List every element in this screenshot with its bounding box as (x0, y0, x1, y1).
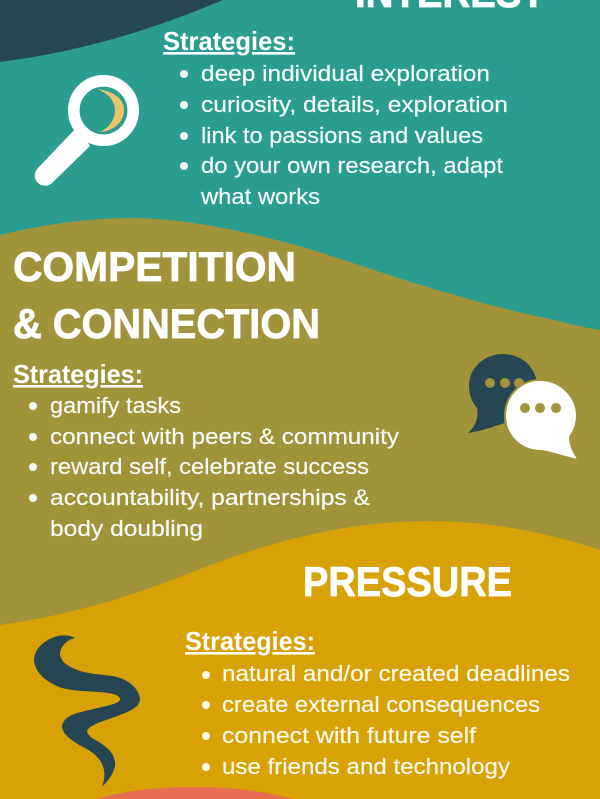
text block: pressure strategies (185, 626, 570, 779)
strategy list: reward self, celebrate success (50, 454, 369, 479)
strategy list: what works (200, 184, 320, 209)
heading: competition and connection (13, 243, 320, 347)
panel: pressure background (0, 521, 600, 799)
heading: pressure: PRESSURE (303, 558, 512, 605)
panel: competition and connection background (0, 218, 600, 640)
coral wave at the bottom (97, 787, 293, 799)
strategies label: Strategies: (185, 626, 315, 656)
strategy list: connect with peers & community (50, 424, 399, 449)
icon: speech bubbles (468, 354, 579, 460)
strategies label: Strategies: (13, 359, 143, 389)
strategies label: Strategies: (163, 26, 295, 56)
strategy list: do your own research, adapt (201, 153, 503, 178)
icon: magnifying glass (35, 81, 133, 186)
strategy list: link to passions and values (201, 123, 483, 148)
strategy list: body doubling (50, 516, 203, 541)
icon: wavy steam (34, 635, 140, 787)
strategy list: accountability, partnerships & (50, 485, 370, 510)
text block: competition strategies (13, 359, 399, 541)
strategy list: natural and/or created deadlines (222, 661, 570, 686)
strategy list: curiosity, details, exploration (201, 92, 508, 117)
dark navy corner wave (0, 0, 223, 62)
heading: competition and connection: & CONNECTION (13, 300, 320, 347)
strategy list: connect with future self (222, 723, 477, 748)
strategy list: gamify tasks (50, 393, 181, 418)
heading: competition and connection: COMPETITION (13, 243, 296, 290)
text block: interest strategies (163, 26, 508, 209)
strategy list: deep individual exploration (201, 61, 490, 86)
strategy list (202, 661, 570, 779)
strategy list (29, 393, 399, 541)
strategy list (180, 61, 508, 209)
strategy list: create external consequences (222, 692, 540, 717)
strategy list: use friends and technology (222, 754, 510, 779)
